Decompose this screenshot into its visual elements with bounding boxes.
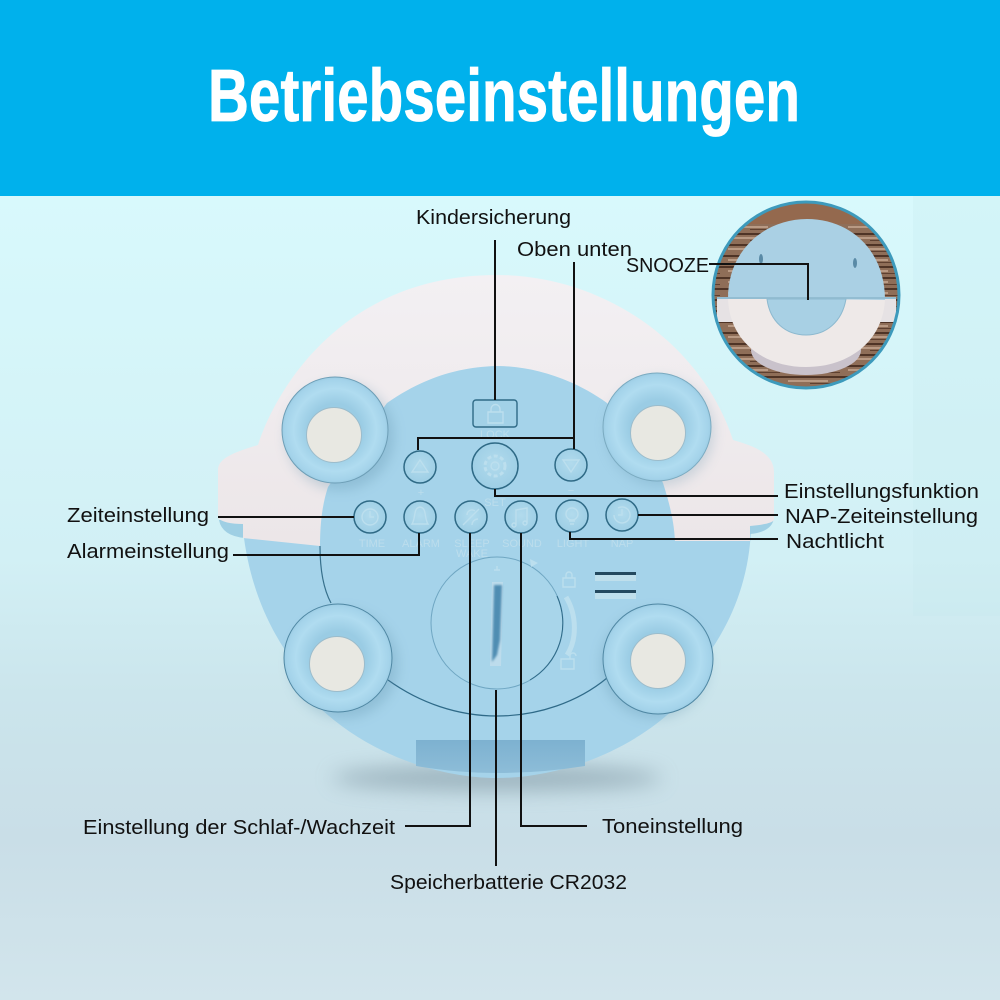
button nap: NAP bbox=[611, 538, 633, 550]
button sound: SOUND bbox=[502, 538, 542, 550]
panel edge line bbox=[320, 546, 331, 603]
blue lower body bbox=[243, 530, 751, 778]
label: Toneinstellung: Toneinstellung bbox=[602, 816, 743, 838]
knob top right bbox=[603, 373, 714, 486]
button light bbox=[556, 500, 589, 550]
label: NAP-Zeiteinstellung: NAP-Zeiteinstellung bbox=[785, 506, 978, 528]
knob top left bbox=[282, 377, 394, 490]
lower lavender rim bbox=[751, 348, 861, 375]
button up: + bbox=[418, 487, 424, 499]
coin slot bbox=[490, 582, 503, 666]
label: Speicherbatterie CR2032: Speicherbatterie CR2032 bbox=[390, 872, 627, 894]
white bowl bbox=[732, 322, 880, 367]
button down: − bbox=[568, 485, 574, 497]
button sleep wake bbox=[454, 501, 490, 560]
dome holes bbox=[759, 254, 763, 264]
battery cover bbox=[431, 557, 576, 689]
label: Zeiteinstellung: Zeiteinstellung bbox=[67, 505, 209, 527]
device shadow bbox=[332, 765, 662, 791]
lock symbols bbox=[563, 572, 575, 587]
white wings bbox=[717, 298, 896, 322]
knob bottom left bbox=[284, 604, 398, 718]
button time: TIME bbox=[359, 538, 385, 550]
blue slivers under side wings bbox=[219, 518, 774, 538]
header band bbox=[0, 0, 1000, 196]
label: Einstellung der Schlaf-/Wachzeit: Einstellung der Schlaf-/Wachzeit bbox=[83, 817, 395, 839]
button nap bbox=[606, 499, 638, 550]
blue dome bbox=[728, 219, 885, 300]
lock button: LOCK bbox=[480, 429, 511, 441]
speaker vents bbox=[595, 572, 636, 599]
device illustration bbox=[218, 275, 774, 791]
button up bbox=[404, 451, 436, 499]
title: Betriebseinstellungen bbox=[208, 54, 800, 137]
button sound bbox=[502, 501, 542, 550]
button alarm bbox=[402, 501, 440, 550]
button alarm: ALARM bbox=[402, 538, 440, 550]
label: Oben unten: Oben unten bbox=[517, 239, 632, 261]
button sleep wake: WAKE bbox=[456, 548, 488, 560]
front control panel bbox=[320, 366, 675, 678]
label: SNOOZE: SNOOZE bbox=[626, 255, 709, 277]
label: Kindersicherung: Kindersicherung bbox=[416, 207, 571, 229]
button settings bbox=[472, 443, 518, 509]
lock button bbox=[473, 400, 517, 441]
snooze button shape bbox=[767, 299, 846, 335]
inset photo: snooze button bbox=[710, 200, 900, 388]
stand recess bbox=[416, 740, 585, 773]
label: Einstellungsfunktion: Einstellungsfunktion bbox=[784, 481, 979, 503]
label: Nachtlicht: Nachtlicht bbox=[786, 531, 884, 553]
button down bbox=[555, 449, 587, 497]
callout lines bbox=[218, 240, 808, 866]
wood top highlight bbox=[748, 204, 864, 224]
button time bbox=[354, 501, 386, 550]
label: Alarmeinstellung: Alarmeinstellung bbox=[67, 541, 229, 563]
button sleep wake: SLEEP bbox=[454, 538, 490, 550]
battery hatch arc bbox=[388, 678, 607, 716]
white shell bbox=[218, 275, 774, 546]
button light: LIGHT bbox=[557, 538, 589, 550]
button settings: SET bbox=[484, 497, 506, 509]
knob bottom right bbox=[601, 604, 713, 718]
